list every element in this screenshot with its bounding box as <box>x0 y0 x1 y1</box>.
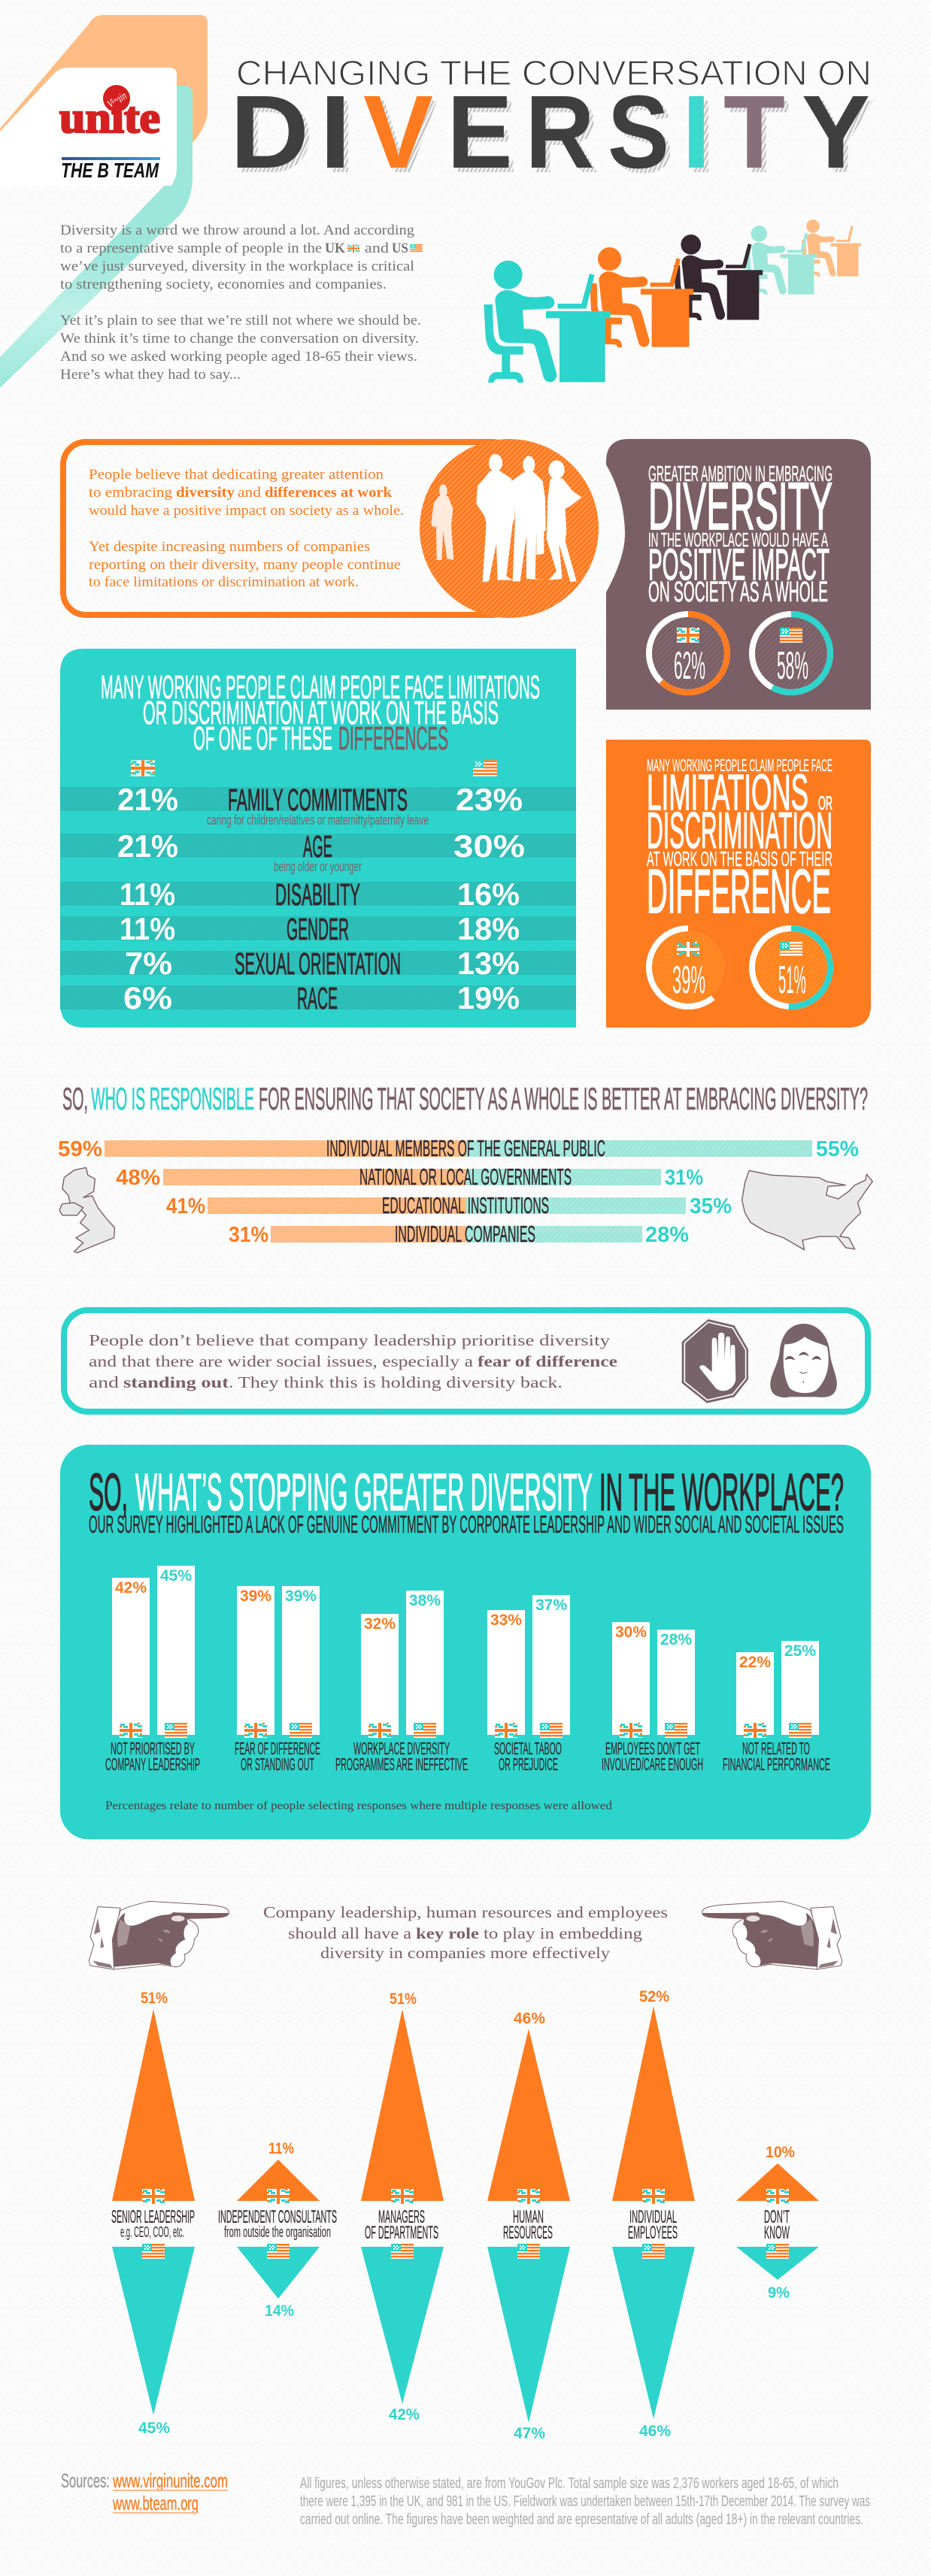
callout text: and <box>89 1373 120 1391</box>
row: age: 30% <box>453 828 525 864</box>
chart: human resources: 47% <box>514 2425 545 2442</box>
chart: don't know: KNOW <box>764 2223 790 2243</box>
bars: programmes ineffective <box>335 1591 468 1774</box>
chart: independent consultants: from outside the organisation <box>224 2224 331 2241</box>
bars: not prioritised: 42% <box>115 1579 147 1597</box>
row: race: RACE <box>297 981 338 1016</box>
title word: diversity: R <box>525 74 594 190</box>
callout text: standing out <box>123 1373 229 1391</box>
logo: The B Team: THE B TEAM <box>61 159 159 182</box>
key role text: to play in embedding <box>484 1924 643 1942</box>
chart: managers of departments <box>361 1990 444 2423</box>
bars: fear of difference: 39% <box>285 1588 317 1605</box>
intro text: and <box>365 241 390 256</box>
bar: general public: INDIVIDUAL MEMBERS OF THE GENERAL PUBLIC <box>326 1135 605 1161</box>
chart: senior leadership: 51% <box>141 1990 168 2007</box>
row: family commitments: 23% <box>456 782 523 817</box>
icon: pointing hand left <box>89 1901 229 1969</box>
chart: individual employees: 52% <box>639 1988 669 2005</box>
row: disability: 11% <box>120 876 175 912</box>
title word: diversity: D <box>235 79 314 195</box>
chart: managers of departments: 51% <box>390 1990 417 2008</box>
icon: people silhouettes in circle <box>420 439 599 618</box>
bars: programmes ineffective: WORKPLACE DIVERSITY <box>353 1739 450 1758</box>
bars: societal taboo <box>487 1595 570 1774</box>
bar: educational institutions <box>166 1192 732 1218</box>
sources: Sources: <box>61 2469 110 2492</box>
intro text: to strengthening society, economies and companies. <box>60 277 387 292</box>
heading: who is responsible: WHO IS RESPONSIBLE <box>91 1081 254 1116</box>
bars: societal taboo: 33% <box>490 1612 522 1629</box>
chart: independent consultants <box>218 2140 337 2320</box>
bars: employees don't get involved: 28% <box>660 1631 692 1648</box>
chart footnote: Percentages relate to number of people selecting responses where multiple responses were allowed <box>105 1800 612 1812</box>
callout text: People believe that dedicating greater attention <box>89 467 384 483</box>
intro text: US <box>392 241 408 256</box>
chart: individual employees: INDIVIDUAL <box>629 2207 677 2227</box>
donut: US 51% <box>752 928 830 1006</box>
table bands <box>60 787 576 1010</box>
panel: what's stopping diversity: COMPANY LEADERSHIP <box>105 1754 200 1774</box>
bar: governments <box>116 1164 703 1190</box>
chart: don't know <box>736 2144 819 2302</box>
callout text: and <box>238 485 262 501</box>
row: age: being older or younger <box>274 859 362 874</box>
logo: Virgin Unite: Virgin <box>105 90 129 111</box>
title word: diversity: I <box>320 74 351 190</box>
title word: diversity: E <box>447 74 513 190</box>
callout text: differences at work <box>265 485 392 501</box>
row: sexual orientation: 7% <box>125 946 172 981</box>
title word: diversity <box>230 74 875 195</box>
donut: UK 62% <box>649 614 727 692</box>
donut: UK 62%: 62% <box>674 644 705 688</box>
table heading <box>101 670 540 757</box>
text: INDEPENDENT CONSULTANTS <box>218 2207 337 2227</box>
row: sexual orientation: SEXUAL ORIENTATION <box>235 946 401 981</box>
chart: human resources <box>487 2010 570 2442</box>
key role text: Company leadership, human resources and employees <box>263 1903 668 1921</box>
row: race: 19% <box>457 980 520 1016</box>
title word: diversity: V <box>363 74 433 190</box>
row: family commitments: caring for children/relatives or maternitty/paternity leave <box>207 813 429 828</box>
text: SENIOR LEADERSHIP <box>111 2207 195 2227</box>
donut: UK 39%: 39% <box>672 958 705 1002</box>
sources: www.bteam.org <box>112 2492 199 2514</box>
row: gender: 18% <box>457 911 520 946</box>
donut: US 58% <box>752 614 830 692</box>
survey methodology footnote <box>300 2475 870 2528</box>
callout text: to face limitations or discrimination at work. <box>89 574 359 590</box>
panel: what's stopping diversity: NOT PRIORITISED BY <box>111 1739 195 1758</box>
map: UK <box>59 1167 114 1253</box>
callout text: to embracing <box>89 485 173 501</box>
intro text: UK <box>325 241 345 256</box>
callout text: reporting on their diversity, many people continue <box>89 557 401 573</box>
title word: diversity: I <box>687 79 715 195</box>
intro text <box>60 222 423 383</box>
logo: Virgin Unite: unite <box>59 93 160 142</box>
bars: societal taboo: OR PREJUDICE <box>499 1754 558 1774</box>
row: disability <box>120 876 520 912</box>
title word: diversity: S <box>612 79 674 195</box>
table heading: OR DISCRIMINATION AT WORK ON THE BASIS <box>143 695 499 731</box>
title line: CHANGING THE CONVERSATION ON <box>236 53 872 92</box>
panel: what's stopping diversity <box>60 1445 871 1839</box>
title word: diversity: T <box>723 74 785 190</box>
chart: individual employees: EMPLOYEES <box>628 2223 678 2243</box>
panel: fear of difference callout <box>64 1310 868 1412</box>
panel: greater ambition stat <box>606 439 871 710</box>
donut: US 51%: 51% <box>778 958 806 1002</box>
bars: fear of difference <box>235 1586 320 1774</box>
bar: educational institutions: 35% <box>690 1194 732 1218</box>
chart: individual employees: 46% <box>639 2423 671 2440</box>
panel: discrimination table <box>60 649 576 1028</box>
row: race <box>123 980 520 1016</box>
panel: what's stopping diversity: FEAR OF DIFFERENCE <box>235 1739 320 1758</box>
logo backing shapes <box>0 15 208 388</box>
bars: employees don't get involved <box>602 1622 703 1774</box>
callout text: Yet despite increasing numbers of companies <box>89 539 370 555</box>
donut: UK 39% <box>649 928 727 1006</box>
bars: programmes ineffective: 32% <box>364 1615 396 1633</box>
sources: www.virginunite.com <box>112 2469 228 2492</box>
chart: don't know: 10% <box>766 2144 795 2161</box>
panel: people believe callout <box>63 439 599 618</box>
row: family commitments: 21% <box>117 782 178 817</box>
row: disability: DISABILITY <box>275 877 360 912</box>
bars: financial performance: 25% <box>784 1642 816 1660</box>
panel heading: SO, <box>89 1463 128 1521</box>
text: OF DEPARTMENTS <box>365 2223 438 2243</box>
bars: societal taboo: SOCIETAL TABOO <box>494 1739 562 1758</box>
title word: diversity: Y <box>802 74 870 190</box>
map: USA <box>742 1170 872 1250</box>
intro text: We think it’s time to change the conversation on diversity. <box>60 331 419 347</box>
bars: not prioritised <box>105 1566 200 1774</box>
bar: general public: 59% <box>58 1137 102 1161</box>
table heading: DIFFERENCES <box>338 721 448 757</box>
bar: general public: 55% <box>816 1137 859 1161</box>
donut: US 58%: 58% <box>777 644 808 688</box>
chart: human resources: RESOURCES <box>503 2223 553 2243</box>
bar: general public <box>58 1135 859 1161</box>
panel: limitations stat <box>606 740 871 1028</box>
title word: diversity: I <box>682 74 711 190</box>
key role text: diversity in companies more effectively <box>320 1944 611 1962</box>
row: race: 6% <box>123 980 172 1016</box>
callout text: and that there are wider social issues, especially a <box>89 1352 474 1370</box>
title word: diversity: S <box>608 74 669 190</box>
row: age: 21% <box>117 828 178 864</box>
panel: what's stopping diversity: OR STANDING OUT <box>241 1754 314 1774</box>
chart: don't know: 9% <box>768 2284 790 2302</box>
title word: diversity: T <box>728 79 790 195</box>
intro text: to a representative sample of people in the <box>60 241 322 256</box>
row: sexual orientation <box>125 946 520 981</box>
icon: stop hand <box>682 1319 748 1403</box>
chart: independent consultants: 14% <box>265 2302 294 2320</box>
key role text <box>263 1903 668 1962</box>
bars: financial performance: NOT RELATED TO <box>742 1739 810 1758</box>
bar chart: who is responsible <box>58 1135 859 1247</box>
bars: not prioritised: 45% <box>160 1567 192 1585</box>
panel heading <box>647 755 832 926</box>
title word: diversity: V <box>368 79 438 195</box>
icon: three-eyed face <box>770 1324 837 1397</box>
key role text: should all have a <box>288 1924 412 1942</box>
callout text: People don’t believe that company leadership prioritise diversity <box>89 1331 611 1349</box>
chart: managers of departments: 42% <box>389 2406 420 2423</box>
callout text <box>89 1331 617 1391</box>
row: sexual orientation: 13% <box>457 946 520 981</box>
panel heading: OR <box>818 793 832 814</box>
callout text <box>89 467 404 590</box>
bar: governments: 31% <box>665 1166 703 1190</box>
bars: societal taboo: 37% <box>535 1597 567 1614</box>
panel: what's stopping diversity: EMPLOYEES DON’T GET <box>605 1739 700 1758</box>
title word: diversity: R <box>529 79 599 195</box>
title word: diversity: Y <box>806 79 875 195</box>
callout text: fear of difference <box>478 1352 617 1370</box>
bar: educational institutions: EDUCATIONAL INSTITUTIONS <box>382 1192 549 1218</box>
panel heading <box>648 462 832 608</box>
bars: programmes ineffective: 38% <box>409 1592 441 1609</box>
chart: senior leadership: e.g. CEO, COO, etc. <box>120 2224 184 2241</box>
intro text: Here’s what they had to say... <box>60 367 241 383</box>
bars: financial performance <box>723 1641 830 1774</box>
chart: individual employees <box>612 1988 695 2440</box>
bar: governments: NATIONAL OR LOCAL GOVERNMENTS <box>359 1164 572 1190</box>
chart: senior leadership: 45% <box>138 2420 170 2437</box>
intro text: we’ve just surveyed, diversity in the workplace is critical <box>60 259 414 274</box>
callout text: . They think this is holding diversity back. <box>229 1373 563 1391</box>
sources <box>61 2469 228 2514</box>
title word: diversity: D <box>230 74 309 190</box>
bars: fear of difference: 39% <box>240 1588 271 1605</box>
bar: individual companies: 31% <box>229 1223 268 1247</box>
intro text: Yet it’s plain to see that we’re still not where we should be. <box>60 313 421 328</box>
illustration: office workers at desks <box>484 219 861 383</box>
intro text: And so we asked working people aged 18-65 their views. <box>60 349 417 365</box>
callout text: would have a positive impact on society as a whole. <box>89 503 404 519</box>
row: family commitments <box>117 782 523 828</box>
row: gender <box>120 911 520 946</box>
table heading: OF ONE OF THESE <box>193 721 332 757</box>
bar: educational institutions: 41% <box>166 1194 205 1218</box>
heading: who is responsible: SO, <box>62 1081 88 1116</box>
row: gender: GENDER <box>287 912 349 946</box>
bars: financial performance: 22% <box>739 1654 771 1671</box>
intro text: Diversity is a word we throw around a lot. And according <box>60 222 415 238</box>
key role text: key role <box>416 1924 479 1942</box>
panel: what's stopping diversity: PROGRAMMES ARE INEFFECTIVE <box>335 1754 468 1774</box>
bar: individual companies: 28% <box>645 1223 689 1247</box>
bar: governments: 48% <box>116 1166 160 1190</box>
callout text: diversity <box>176 485 235 501</box>
chart: senior leadership <box>111 1990 195 2437</box>
icon: pointing hand right <box>702 1901 842 1969</box>
row: age: AGE <box>303 829 332 864</box>
panel: what's stopping diversity: INVOLVED/CARE ENOUGH <box>602 1754 703 1774</box>
title word: diversity: E <box>451 79 517 195</box>
chart: managers of departments: MANAGERS <box>378 2207 425 2227</box>
row: family commitments: FAMILY COMMITMENTS <box>228 782 408 817</box>
bar: individual companies: INDIVIDUAL COMPANIES <box>395 1221 535 1247</box>
chart: human resources: 46% <box>514 2010 545 2027</box>
chart: don't know: DON’T <box>764 2207 790 2227</box>
chart: independent consultants: 11% <box>268 2140 294 2157</box>
icon: table flags <box>131 760 497 776</box>
title word: diversity: I <box>324 79 356 195</box>
row: age <box>117 828 525 874</box>
bar: individual companies <box>229 1221 689 1247</box>
row: gender: 11% <box>120 911 175 946</box>
bars: employees don't get involved: 30% <box>615 1624 647 1641</box>
chart: human resources: HUMAN <box>513 2207 544 2227</box>
row: disability: 16% <box>457 876 520 912</box>
